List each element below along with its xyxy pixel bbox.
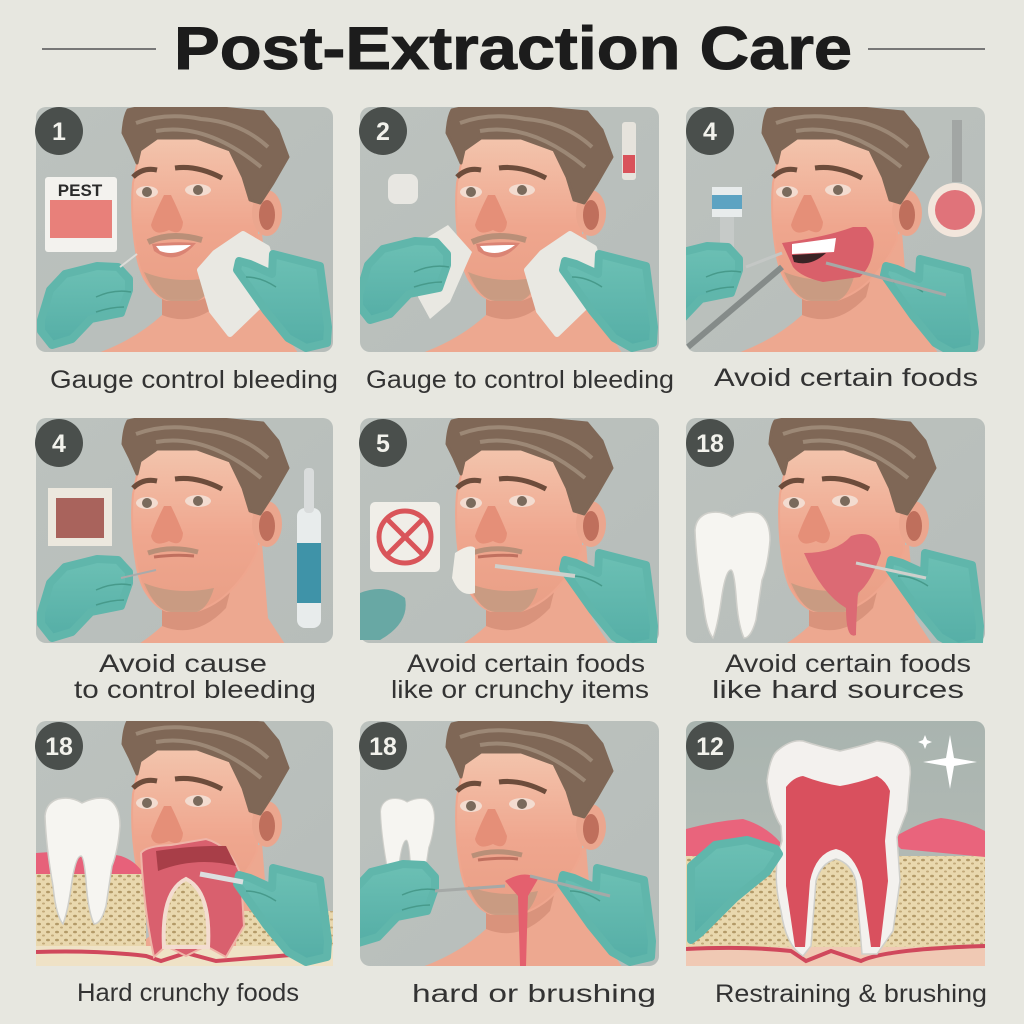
- sparkles: [918, 735, 977, 789]
- caption 5: [391, 650, 649, 704]
- step number 5: [359, 419, 407, 467]
- caption 4: [74, 650, 316, 704]
- tooth section: [767, 741, 910, 956]
- step number 4: [35, 419, 83, 467]
- panel 6: tooth and bleeding gum: [686, 416, 985, 664]
- step number 4: 4: [703, 118, 717, 146]
- panel 8: tooth picture and instruments: [347, 719, 659, 967]
- panel 7: extraction socket and tooth: [35, 716, 333, 966]
- panel 1: gauze on cheek: PEST: [58, 181, 103, 200]
- caption 9: Restraining & brushing: [715, 980, 987, 1008]
- caption 6: Avoid certain foods: [725, 650, 971, 678]
- step number 1: 1: [52, 118, 66, 146]
- step number 4: 4: [52, 430, 66, 458]
- caption 3: Avoid certain foods: [714, 364, 978, 392]
- title: Post-Extraction Care: [174, 15, 852, 82]
- caption 5: Avoid certain foods: [407, 650, 645, 678]
- step number 2: [359, 107, 407, 155]
- caption 4: Avoid cause: [99, 650, 267, 678]
- caption 6: like hard sources: [712, 676, 964, 704]
- step number 1: [35, 107, 83, 155]
- caption 4: to control bleeding: [74, 676, 316, 704]
- caption 8: hard or brushing: [412, 980, 656, 1008]
- step number 12: [686, 722, 734, 770]
- step number 18: 18: [696, 430, 724, 458]
- panel 2: two gauze pads: [359, 105, 659, 353]
- step number 4: [686, 107, 734, 155]
- gum and bone: [36, 852, 333, 966]
- panel 4: man with toothbrush: [35, 416, 333, 664]
- step number 18: [686, 419, 734, 467]
- step number 18: 18: [45, 733, 73, 761]
- step number 18: [35, 722, 83, 770]
- gum and bone: [686, 818, 985, 966]
- caption 2: Gauge to control bleeding: [366, 366, 674, 394]
- panel 1: gauze on cheek: [35, 105, 333, 353]
- step number 12: 12: [696, 733, 724, 761]
- open socket: [141, 839, 244, 957]
- caption 5: like or crunchy items: [391, 676, 649, 704]
- caption 1: Gauge control bleeding: [50, 366, 338, 394]
- step number 5: 5: [376, 430, 390, 458]
- step number 18: [359, 722, 407, 770]
- glove: [691, 840, 779, 940]
- caption 7: Hard crunchy foods: [77, 979, 299, 1007]
- panel 3: open mouth with instruments: [651, 105, 985, 353]
- step number 18: 18: [369, 733, 397, 761]
- caption 6: [712, 650, 971, 704]
- step number 2: 2: [376, 118, 390, 146]
- panel 9: large tooth cross-section: [686, 721, 985, 966]
- panel 5: prohibited sign with gauze: [359, 416, 659, 664]
